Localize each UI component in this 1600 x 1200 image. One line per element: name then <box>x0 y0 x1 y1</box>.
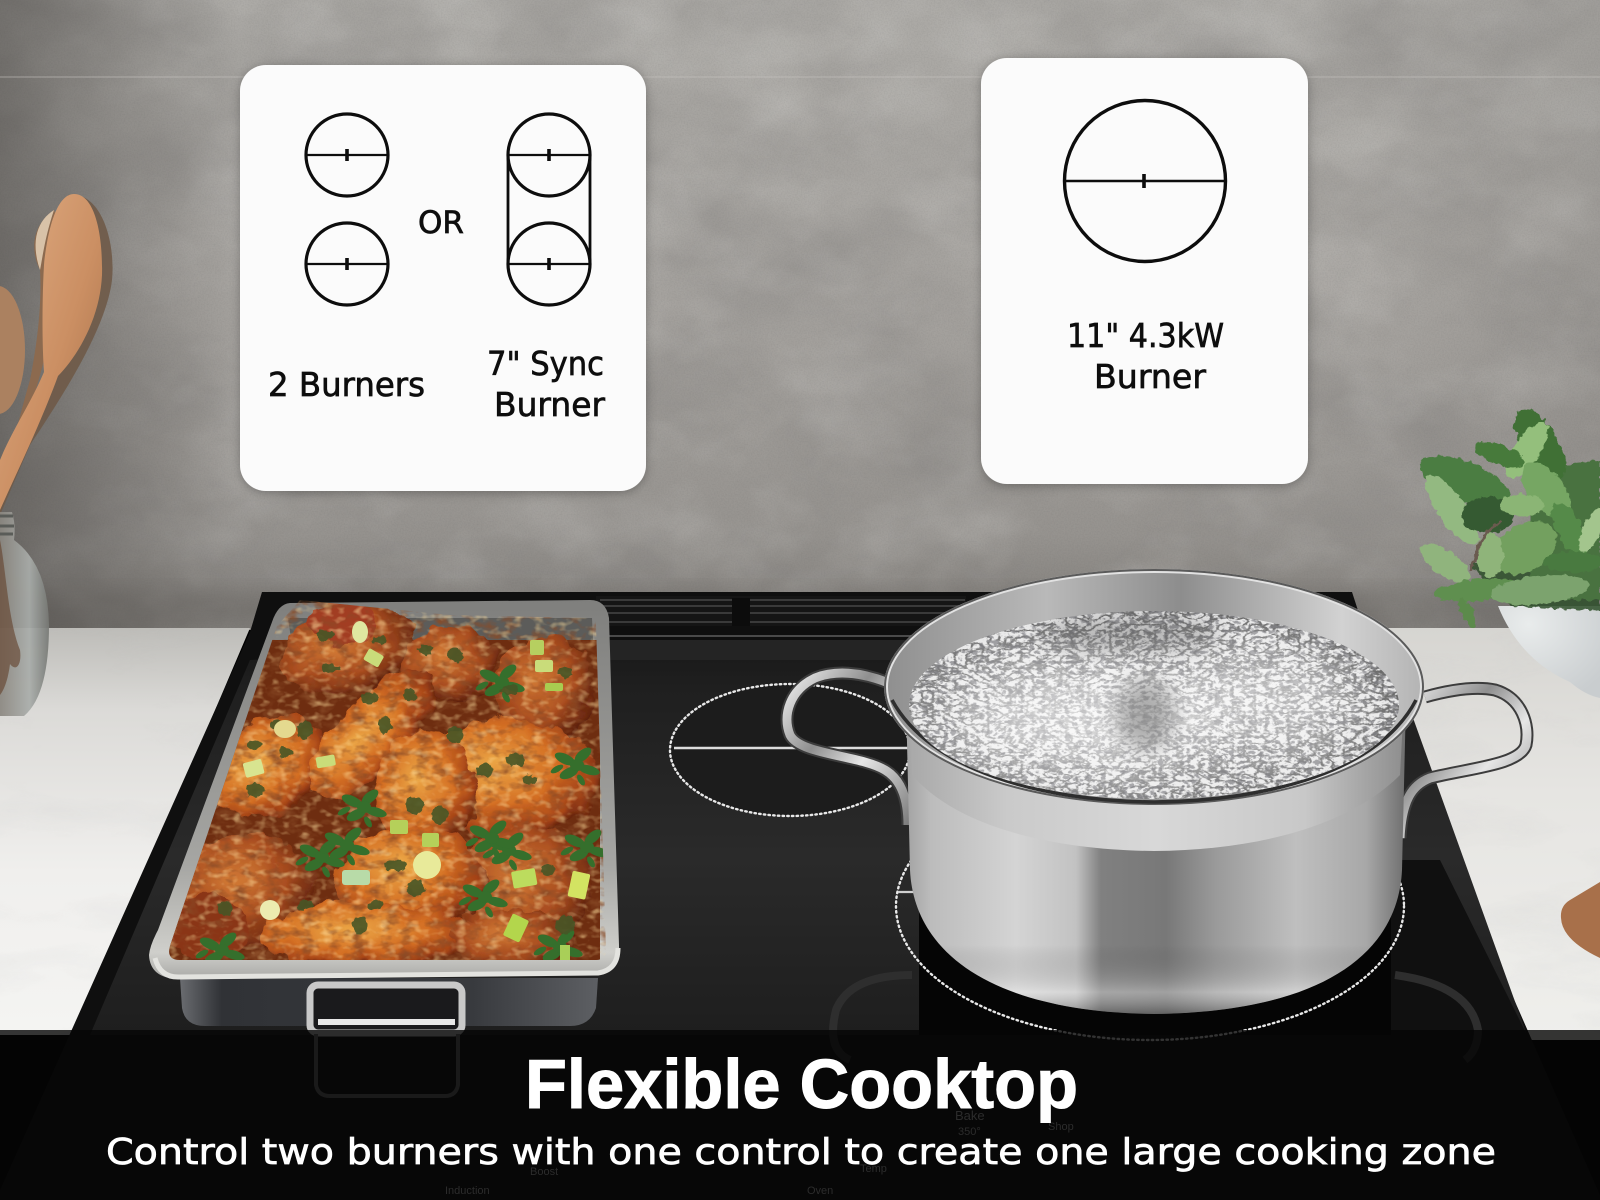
pot rim <box>886 571 1422 803</box>
faint cooktop controls: Oven <box>807 1185 833 1197</box>
roasting pan with chicken <box>149 589 620 1033</box>
or label: OR <box>418 205 464 241</box>
faint cooktop controls: 350° <box>958 1126 981 1138</box>
pot handle right <box>1400 688 1527 838</box>
icon: mint leaves <box>1413 401 1600 629</box>
food <box>169 600 606 960</box>
label: 7 inch sync burner <box>487 344 605 424</box>
faint cooktop controls: Induction <box>445 1185 490 1197</box>
marble veining <box>0 628 1600 1040</box>
pan rim <box>149 600 619 979</box>
subtitle: Control two burners with one control to create one large cooking zone <box>106 1132 1496 1173</box>
wooden spoons and jar <box>0 194 113 716</box>
faint cooktop controls: Temp <box>860 1163 887 1175</box>
chicken pieces <box>167 589 598 970</box>
label: 11 inch 4.3kW burner: 11" 4.3kW <box>1067 316 1224 355</box>
left burner marking <box>670 684 910 816</box>
icon: two separate burners <box>306 114 388 305</box>
icon: spoon shadow <box>0 195 113 515</box>
pot reflections <box>833 975 1478 1060</box>
boiling water <box>900 605 1410 805</box>
caption bar <box>0 1030 1600 1200</box>
parsley clumps <box>194 662 611 972</box>
white card: 11 inch burner <box>981 58 1308 484</box>
marble counter right <box>1340 628 1600 1040</box>
right burner marking <box>896 772 1404 1040</box>
glass cooktop <box>0 592 1600 1200</box>
icon: left spoon <box>0 286 25 414</box>
icon: glass jar <box>0 512 49 716</box>
pot body <box>906 700 1406 1014</box>
icon: large burner <box>1064 100 1226 262</box>
pot neck band <box>908 700 1404 851</box>
faint cooktop controls <box>445 1108 1074 1197</box>
faint cooktop controls: Bake <box>955 1108 985 1123</box>
wooden board <box>1561 882 1600 958</box>
label: 2 burners: 2 Burners <box>268 365 425 404</box>
faint cooktop controls: Boost <box>530 1166 558 1178</box>
pesto specks <box>217 630 575 934</box>
icon: back spoon <box>6 210 57 470</box>
kitchen wall <box>0 0 1600 630</box>
pan handle <box>310 985 462 1033</box>
label: 7 inch sync burner: 7" Sync <box>487 344 604 383</box>
pot handle left <box>787 673 908 825</box>
mint plant in bowl <box>1413 401 1600 698</box>
icon: main spoon <box>0 194 102 510</box>
cooktop vent <box>596 596 1000 636</box>
stock pot <box>787 570 1527 1014</box>
icon: synced burner <box>508 114 590 305</box>
icon: bowl <box>1498 606 1600 698</box>
title: Flexible Cooktop <box>525 1045 1078 1123</box>
marble counter left <box>0 628 250 1035</box>
label: 11 inch 4.3kW burner <box>1067 316 1224 396</box>
label: 7 inch sync burner: Burner <box>494 385 605 424</box>
faint cooktop controls: Shop <box>1048 1121 1074 1133</box>
label: 11 inch 4.3kW burner: Burner <box>1094 357 1206 396</box>
reflection of pan handle <box>316 1034 458 1096</box>
white card: 2 burners or sync burner <box>240 65 646 491</box>
scallions <box>242 621 590 960</box>
pan body <box>180 978 598 1026</box>
